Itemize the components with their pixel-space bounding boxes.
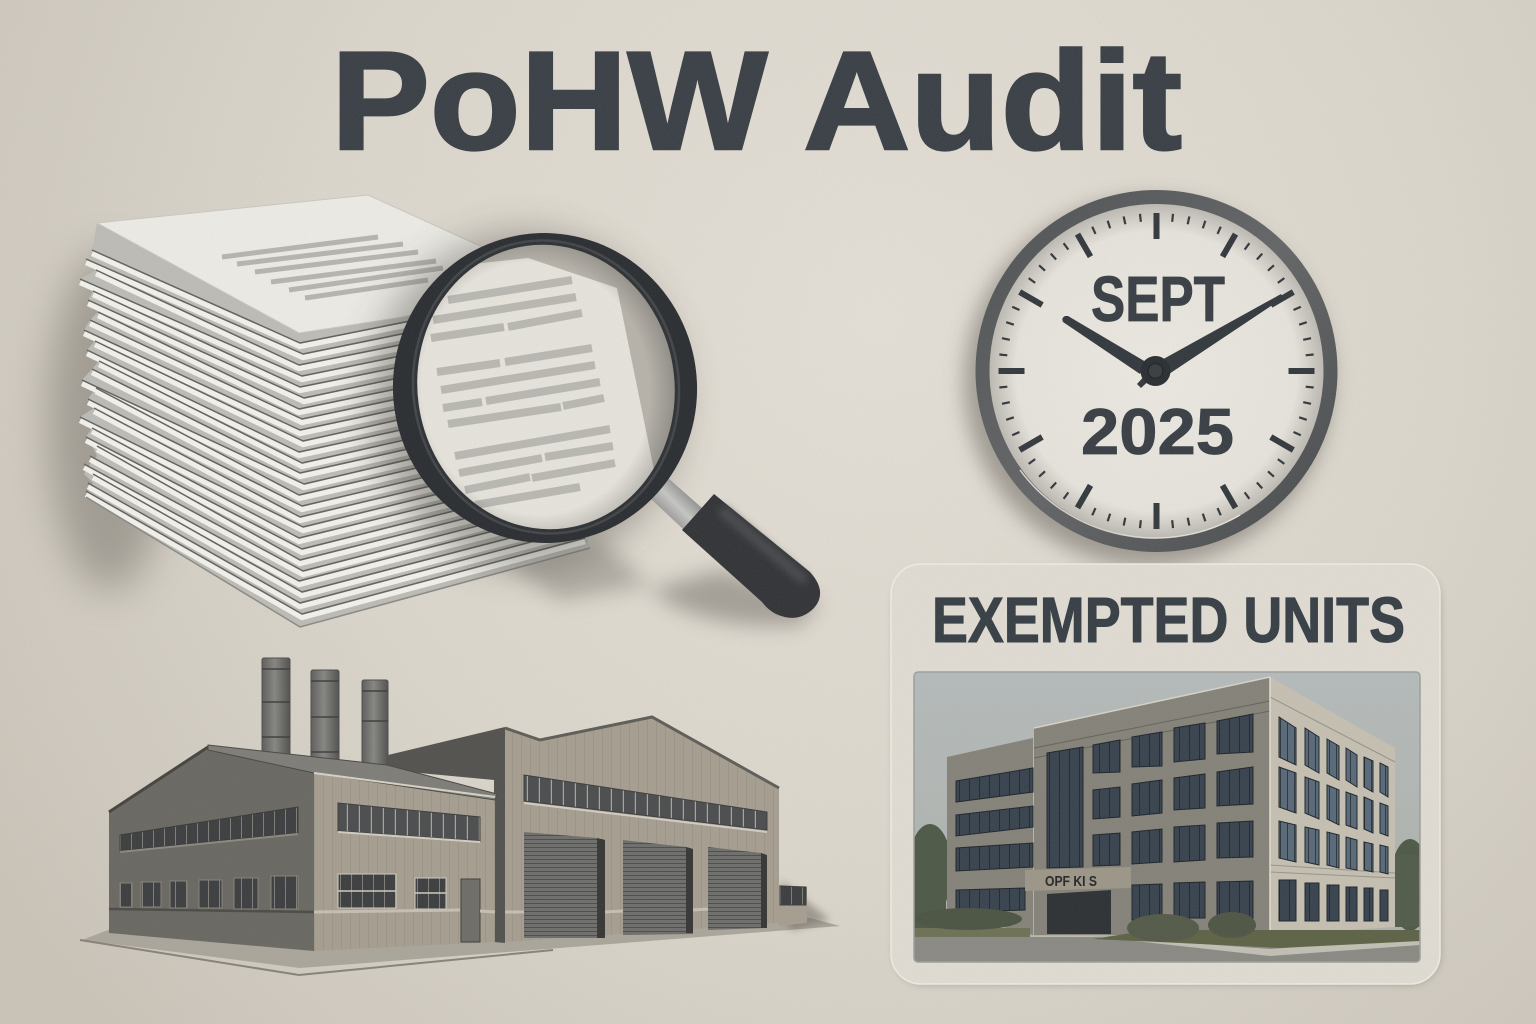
- icon: paper stack with magnifying glass: [48, 195, 820, 627]
- photo: office building: [908, 672, 1430, 962]
- magnifier shadow on stack: [370, 235, 680, 565]
- dark connecting wall: [388, 727, 505, 943]
- ground-floor side windows: [1279, 880, 1388, 921]
- left wing: [947, 738, 1033, 935]
- middle facade: [314, 773, 708, 951]
- magnifier handle: [650, 478, 820, 618]
- clock ticks: [998, 213, 1314, 529]
- right hall facade: [505, 717, 779, 942]
- front windows: [956, 714, 1253, 920]
- shrubs and lawn: [914, 908, 1420, 948]
- left shaded facade: [109, 747, 314, 951]
- paper stack: [80, 195, 590, 627]
- factory roof: [208, 745, 497, 800]
- clock hands: [1062, 294, 1283, 388]
- top sheet with text lines: [97, 195, 500, 333]
- side windows: [1279, 717, 1388, 874]
- magnifier lens: [392, 233, 698, 543]
- right light facade: [1270, 677, 1395, 935]
- illustration: factory: [80, 658, 840, 975]
- panel heading: EXEMPTED UNITS: [932, 584, 1405, 656]
- small annex: [779, 885, 807, 926]
- entrance sign: OPF KI S: [1045, 873, 1097, 890]
- panel: exempted units: [891, 564, 1440, 984]
- road and pavement: [914, 936, 1420, 962]
- chimneys: [262, 658, 388, 774]
- title: PoHW Audit: [331, 22, 1182, 179]
- clock label: SEPT: SEPT: [1091, 263, 1225, 335]
- trees: [908, 824, 1430, 931]
- icon: clock: [964, 190, 1338, 566]
- clock label: 2025: 2025: [1081, 395, 1234, 468]
- entrance doors: [1047, 890, 1111, 934]
- ground shadow and pavement: [80, 880, 840, 975]
- entrance sign: [1025, 867, 1131, 891]
- centre block: [1034, 677, 1270, 935]
